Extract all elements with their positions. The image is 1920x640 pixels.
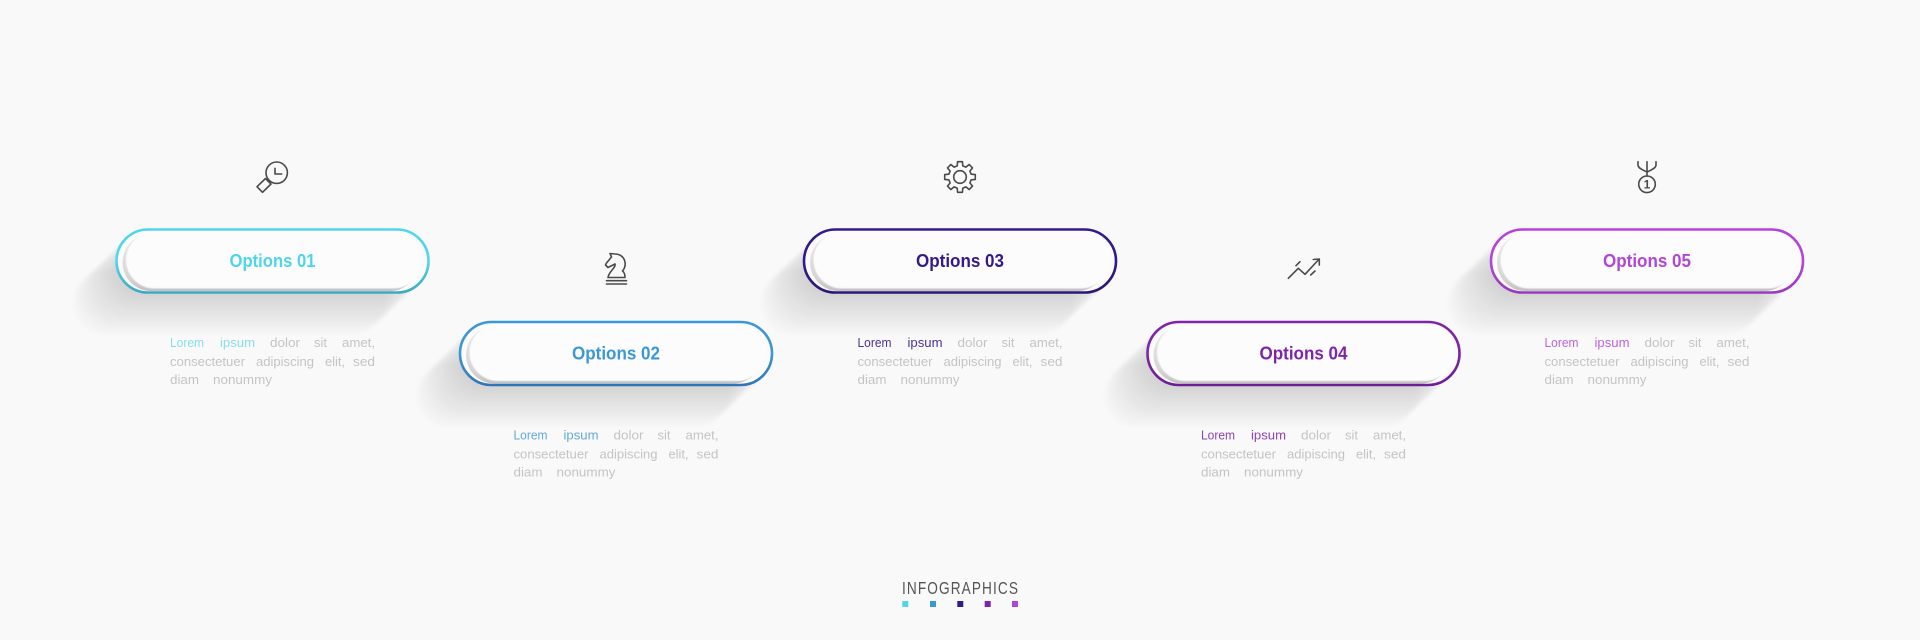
icon: trend arrow (1288, 259, 1319, 278)
text block: ipsum (564, 428, 598, 442)
heading: Options 02 (572, 344, 660, 364)
long shadow (760, 230, 1116, 334)
text block: amet, (1716, 336, 1750, 350)
icon: chess knight (606, 254, 626, 284)
icon: gear (945, 162, 975, 192)
heading: Options 01 (230, 251, 316, 271)
pill button (1148, 322, 1460, 385)
text block: sit (1688, 336, 1702, 350)
text block: consectetuer (1201, 448, 1276, 462)
text block: ipsum (908, 336, 942, 350)
pill button (804, 230, 1116, 292)
text block (1544, 336, 1750, 387)
text block: consectetuer (514, 448, 588, 462)
text block: dolor (270, 336, 300, 350)
wordmark title: INFOGRAPHICS (902, 580, 1018, 598)
text block: sed (1728, 355, 1750, 369)
text block: Lorem (1544, 336, 1578, 350)
text block: elit, (668, 448, 688, 462)
text block: diam (1201, 466, 1230, 480)
text block: amet, (342, 336, 375, 350)
text block: amet, (1030, 336, 1062, 350)
text block: sed (696, 448, 719, 462)
long shadow (1447, 230, 1803, 334)
panel: option 05 (1447, 162, 1803, 387)
panel: option 04 (1104, 259, 1460, 480)
text block: sed (1384, 448, 1406, 462)
text block: nonummy (1588, 373, 1647, 387)
long shadow (416, 322, 772, 427)
text block: dolor (1301, 428, 1331, 442)
text block: sit (1002, 336, 1015, 350)
icon: medal number one (1638, 162, 1656, 193)
text block: adipiscing (256, 355, 314, 369)
text block: elit, (325, 355, 345, 369)
text block (1201, 428, 1406, 480)
footer wordmark (902, 580, 1018, 607)
text block: adipiscing (600, 448, 658, 462)
text block: amet, (686, 428, 718, 442)
text block: sit (658, 428, 671, 442)
heading: Options 05 (1603, 251, 1691, 271)
text block: nonummy (900, 373, 960, 387)
text block: sed (1040, 355, 1063, 369)
text block: ipsum (220, 336, 255, 350)
text block: consectetuer (170, 355, 245, 369)
text block: Lorem (1201, 428, 1235, 442)
pill button (116, 230, 428, 292)
text block: diam (170, 373, 199, 387)
text block: sed (353, 355, 375, 369)
text block: ipsum (1251, 428, 1286, 442)
text block: sit (1345, 428, 1359, 442)
text block: nonummy (1244, 466, 1304, 480)
icon: magnifier with clock (257, 162, 287, 192)
text block: dolor (614, 428, 643, 442)
text block: diam (858, 373, 886, 387)
text block: Lorem (514, 428, 548, 442)
text block: nonummy (556, 466, 616, 480)
text block: consectetuer (1544, 355, 1620, 369)
text block: sit (314, 336, 328, 350)
panel: option 03 (760, 162, 1116, 387)
text block: adipiscing (1630, 355, 1689, 369)
panel: option 02 (416, 254, 772, 480)
long shadow (1104, 322, 1460, 427)
text block: dolor (1644, 336, 1674, 350)
text block: nonummy (213, 373, 273, 387)
text block: consectetuer (858, 355, 932, 369)
text block: Lorem (858, 336, 892, 350)
text block (170, 336, 375, 387)
text block (858, 336, 1063, 387)
text block: diam (514, 466, 542, 480)
icon: medal number one: 1 (1644, 178, 1651, 192)
panel: option 01 (73, 162, 429, 387)
text block: amet, (1373, 428, 1406, 442)
text block: adipiscing (944, 355, 1002, 369)
text block: Lorem (170, 336, 204, 350)
pill button (1491, 230, 1803, 292)
text block: diam (1544, 373, 1574, 387)
text block: adipiscing (1287, 448, 1345, 462)
long shadow (73, 230, 429, 334)
text block: ipsum (1594, 336, 1630, 350)
colour legend squares (902, 601, 1018, 607)
pill button (460, 322, 772, 385)
text block: elit, (1012, 355, 1032, 369)
heading: Options 04 (1260, 344, 1348, 364)
text block: elit, (1700, 355, 1720, 369)
text block: dolor (958, 336, 987, 350)
text block (514, 428, 719, 480)
text block: elit, (1356, 448, 1376, 462)
heading: Options 03 (916, 251, 1004, 271)
